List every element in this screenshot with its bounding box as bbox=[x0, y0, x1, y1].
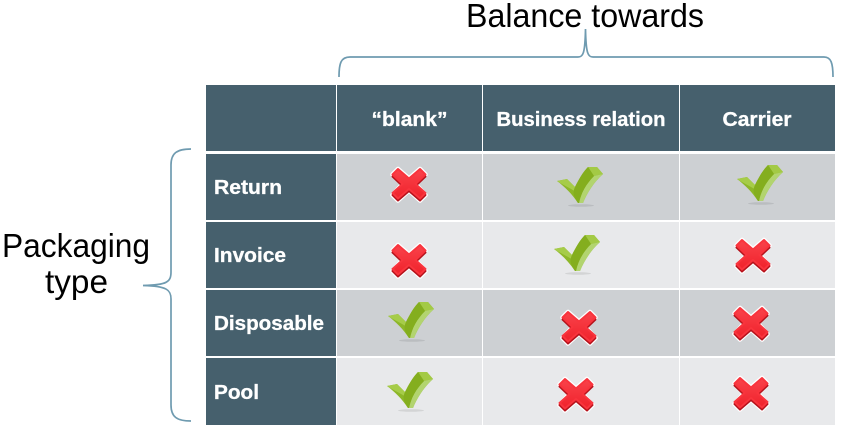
row: Invoice: Invoice bbox=[214, 245, 286, 267]
row: Return: Return bbox=[214, 177, 282, 199]
row: Return bbox=[206, 154, 835, 220]
row: Disposable: Disposable bbox=[214, 313, 324, 335]
header row bbox=[206, 85, 835, 151]
left label: Packaging type: Packaging bbox=[2, 227, 150, 264]
left label: Packaging type: type bbox=[45, 263, 108, 300]
row: Pool bbox=[206, 358, 835, 425]
header row: “blank” bbox=[372, 109, 448, 131]
header row: Business relation bbox=[496, 109, 666, 131]
left label: Packaging type bbox=[2, 227, 150, 300]
top brace bbox=[339, 29, 833, 77]
header row: Carrier bbox=[722, 109, 792, 131]
row: Pool: Pool bbox=[214, 382, 259, 404]
table bbox=[206, 85, 835, 425]
row: Invoice bbox=[206, 222, 835, 288]
left brace bbox=[143, 149, 191, 421]
row: Disposable bbox=[206, 290, 835, 356]
